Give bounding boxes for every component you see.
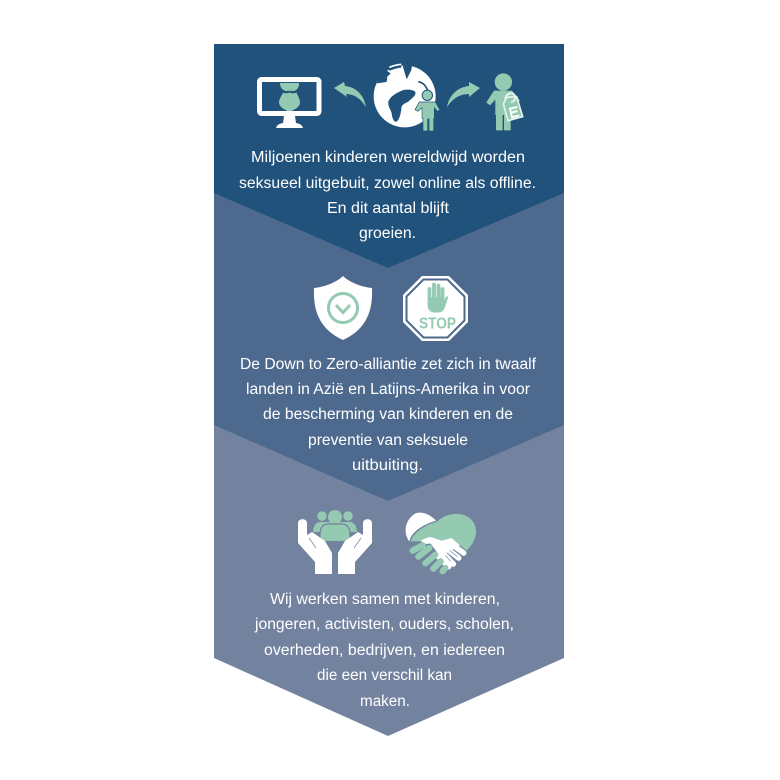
text block: top panel: seksueel uitgebuit, zowel online als offline.: [239, 175, 536, 192]
text block: bottom panel: overheden, bedrijven, en iedereen: [264, 642, 505, 659]
text block: top panel: En dit aantal blijft: [327, 200, 450, 217]
icon: stop sign with hand: [403, 276, 468, 341]
panel: top chevron: [214, 44, 564, 268]
text block: middle panel: uitbuiting.: [352, 457, 423, 474]
text block: bottom panel: jongeren, activisten, ouders, scholen,: [254, 616, 514, 633]
text block: top panel: Miljoenen kinderen wereldwijd worden: [251, 149, 525, 166]
arrow: curved left: [334, 82, 366, 107]
icon: heart with handshake: [406, 513, 476, 571]
text block: top panel: [239, 149, 536, 242]
text block: middle panel: de bescherming van kinderen en de: [263, 406, 513, 423]
text block: top panel: groeien.: [359, 225, 416, 242]
text block: middle panel: preventie van seksuele: [308, 432, 468, 449]
panel: bottom chevron: [214, 420, 564, 736]
icon: stop sign with hand: STOP: [419, 316, 456, 332]
text block: middle panel: landen in Azië en Latijns-Amerika in voor: [246, 381, 530, 398]
text block: bottom panel: die een verschil kan: [317, 667, 452, 684]
icon: shield with check: [314, 276, 372, 340]
icon: child with price tag: [486, 73, 523, 130]
text block: middle panel: [240, 356, 537, 474]
text block: bottom panel: [254, 591, 514, 710]
text block: bottom panel: maken.: [360, 693, 410, 710]
icon: globe with child: [374, 64, 440, 131]
arrow: curved right: [447, 82, 480, 107]
icon: hands holding people: [298, 510, 372, 574]
text block: bottom panel: Wij werken samen met kinderen,: [270, 591, 500, 608]
icon: monitor with torso: [260, 80, 319, 128]
text block: middle panel: De Down to Zero-alliantie zet zich in twaalf: [240, 356, 537, 373]
panel: middle chevron: [214, 190, 564, 501]
